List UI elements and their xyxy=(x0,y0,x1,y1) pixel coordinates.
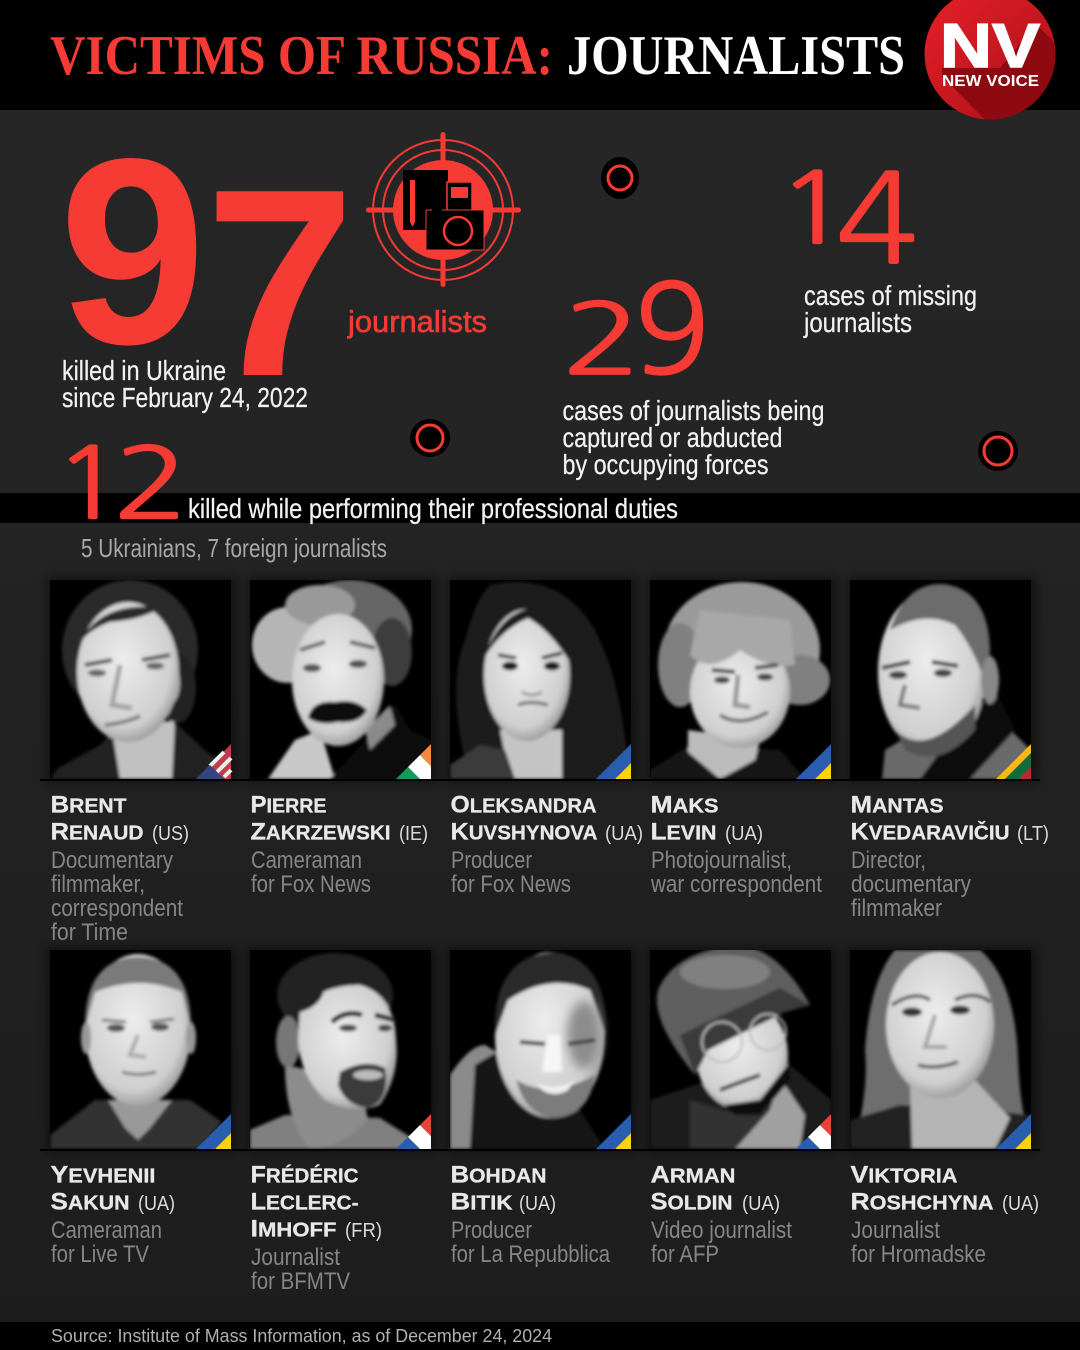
role: filmmaker, xyxy=(51,871,145,898)
name: BITIK xyxy=(450,1188,513,1216)
bullet hole 2 xyxy=(410,419,450,457)
name: LECLERC- xyxy=(250,1188,358,1216)
role: Producer xyxy=(451,1217,532,1244)
footer: source: Source: Institute of Mass Information, as of December 24, 2024 xyxy=(51,1326,552,1346)
name: (US) xyxy=(152,823,189,845)
flag: France xyxy=(396,1114,431,1149)
flag: Ukraine xyxy=(596,1114,631,1149)
role: Cameraman xyxy=(51,1217,162,1244)
name: RENAUD xyxy=(50,818,144,846)
role: Director, xyxy=(851,847,926,874)
role: Journalist xyxy=(851,1217,940,1244)
name: KUVSHYNOVA xyxy=(450,818,598,846)
portrait xyxy=(47,947,237,1152)
name: IMHOFF xyxy=(250,1216,336,1242)
name xyxy=(250,792,428,846)
footer: source xyxy=(0,1322,1080,1350)
caption: cases of missing journalists: cases of missing xyxy=(804,280,977,311)
name: ZAKRZEWSKI xyxy=(250,818,390,846)
flag: France xyxy=(796,1114,831,1149)
black band xyxy=(0,493,1080,523)
stat: 12 killed on duty xyxy=(53,435,678,533)
logo: NV New Voice: NEW VOICE xyxy=(942,73,1039,90)
stat: 29 captured xyxy=(562,268,824,480)
stat: 29 captured: 9 xyxy=(634,268,710,392)
stat: 14 missing xyxy=(776,157,977,338)
card: Yevhenii Sakun xyxy=(47,947,237,1268)
name xyxy=(850,1162,1039,1216)
role xyxy=(251,1244,350,1295)
caption: cases captured or abducted: captured or abducted xyxy=(562,422,782,453)
flag: Ukraine xyxy=(996,1114,1031,1149)
card: Bohdan Bitik xyxy=(447,947,637,1268)
name: ROSHCHYNA xyxy=(850,1188,994,1216)
role: for Live TV xyxy=(51,1241,149,1268)
name xyxy=(50,1162,175,1216)
caption: killed while performing: killed while performing their professional duties xyxy=(188,493,678,524)
stat: 14 missing: 4 xyxy=(836,157,918,281)
flag: Ireland xyxy=(396,744,431,779)
role: for BFMTV xyxy=(251,1268,350,1295)
name: (UA) xyxy=(1002,1193,1039,1215)
logo: NV New Voice: NV xyxy=(940,12,1040,81)
name xyxy=(450,1162,556,1216)
portrait xyxy=(247,947,437,1152)
name: ARMAN xyxy=(650,1162,736,1188)
portrait xyxy=(47,577,237,782)
role: documentary xyxy=(851,871,971,898)
role: Video journalist xyxy=(651,1217,792,1244)
title xyxy=(50,25,905,87)
flag: Ukraine xyxy=(596,744,631,779)
caption: cases of missing journalists: journalists xyxy=(803,307,912,338)
name: MAKS xyxy=(650,792,718,818)
name: MANTAS xyxy=(850,792,944,818)
portrait xyxy=(647,945,837,1152)
role: Documentary xyxy=(51,847,173,874)
name: (LT) xyxy=(1017,823,1049,845)
stat: 14 missing: 1 xyxy=(776,160,851,258)
portrait xyxy=(847,577,1037,782)
name: (UA) xyxy=(138,1193,175,1215)
name: SAKUN xyxy=(50,1188,130,1216)
flag: Ukraine xyxy=(796,744,831,779)
caption: cases of missing journalists xyxy=(803,280,977,338)
name: (UA) xyxy=(605,823,643,845)
name: (UA) xyxy=(725,823,763,845)
caption: cases captured or abducted: by occupying forces xyxy=(562,449,768,480)
header band xyxy=(0,0,1080,110)
name: VIKTORIA xyxy=(850,1162,958,1188)
flag: Lithuania xyxy=(996,744,1031,779)
role: for Fox News xyxy=(251,871,371,898)
role xyxy=(451,847,571,898)
role xyxy=(51,1217,162,1268)
big number: 97 journalists killed xyxy=(59,104,355,432)
stat: 12 killed on duty: 1 xyxy=(53,435,125,533)
card: Pierre Zakrzewski xyxy=(247,577,437,898)
caption: killed in Ukraine: since February 24, 2022 xyxy=(62,382,308,413)
name xyxy=(650,792,763,846)
sub-caption: nationalities: 5 Ukrainians, 7 foreign journalists xyxy=(81,533,387,563)
name: LEVIN xyxy=(650,818,716,846)
flag: US xyxy=(196,744,231,779)
role xyxy=(51,847,183,946)
role xyxy=(251,847,371,898)
name xyxy=(650,1162,780,1216)
role xyxy=(650,847,822,898)
portrait xyxy=(447,947,637,1152)
portrait xyxy=(247,577,437,782)
role xyxy=(851,847,971,922)
role: for Fox News xyxy=(451,871,571,898)
role: correspondent xyxy=(51,895,183,922)
bullet hole 3 xyxy=(978,431,1018,471)
stat: 29 captured: 2 xyxy=(562,291,642,389)
big number: 97 journalists killed: 9 xyxy=(59,104,206,400)
role: filmmaker xyxy=(851,895,942,922)
role: for La Repubblica xyxy=(451,1241,611,1268)
role: Journalist xyxy=(251,1244,340,1271)
portrait xyxy=(847,947,1037,1152)
icon: target with notebook and camera xyxy=(366,132,521,287)
card: Frederic Leclerc-Imhoff xyxy=(247,947,437,1295)
name: BRENT xyxy=(50,792,126,818)
logo: NV New Voice xyxy=(924,0,1060,125)
title: VICTIMS OF RUSSIA: xyxy=(50,25,553,87)
caption: killed in Ukraine: killed in Ukraine xyxy=(62,355,226,386)
caption: cases captured or abducted xyxy=(562,395,824,480)
label: journalists: journalists xyxy=(347,304,487,339)
role: Cameraman xyxy=(251,847,362,874)
name: OLEKSANDRA xyxy=(450,792,596,818)
name: FRÉDÉRIC xyxy=(250,1162,358,1188)
bullet hole 1 xyxy=(601,157,639,199)
big number: 97 journalists killed: 7 xyxy=(205,133,355,432)
role: Photojournalist, xyxy=(651,847,792,874)
name: (IE) xyxy=(399,823,428,845)
name xyxy=(450,792,643,846)
role: Producer xyxy=(451,847,532,874)
caption: killed in Ukraine xyxy=(62,355,308,413)
role: for Time xyxy=(51,919,128,946)
title: JOURNALISTS xyxy=(567,25,905,87)
name: YEVHENII xyxy=(50,1162,156,1188)
portrait xyxy=(447,577,637,782)
portrait xyxy=(647,577,837,782)
flag: Ukraine xyxy=(196,1114,231,1149)
caption: cases captured or abducted: cases of journalists being xyxy=(562,395,824,426)
card: Brent Renaud xyxy=(47,577,237,946)
role xyxy=(451,1217,611,1268)
name xyxy=(50,792,189,846)
card: Maks Levin xyxy=(647,577,837,898)
role xyxy=(651,1217,792,1268)
name xyxy=(850,792,1049,846)
card: Oleksandra Kuvshynova xyxy=(447,577,643,898)
name: (UA) xyxy=(519,1193,556,1215)
name xyxy=(250,1162,382,1242)
role xyxy=(851,1217,986,1268)
role: war correspondent xyxy=(650,871,822,898)
name: SOLDIN xyxy=(650,1188,732,1216)
name: (UA) xyxy=(742,1193,780,1215)
stat: 12 killed on duty: 2 xyxy=(113,435,189,533)
role: for AFP xyxy=(651,1241,719,1268)
name: PIERRE xyxy=(250,792,326,818)
name: KVEDARAVIČIU xyxy=(850,818,1010,846)
role: for Hromadske xyxy=(851,1241,986,1268)
name: (FR) xyxy=(345,1220,382,1242)
card: Mantas Kvedaravicius xyxy=(847,577,1049,922)
card: Arman Soldin xyxy=(647,945,837,1268)
name: BOHDAN xyxy=(450,1162,546,1188)
card: Viktoria Roshchyna xyxy=(847,947,1039,1268)
